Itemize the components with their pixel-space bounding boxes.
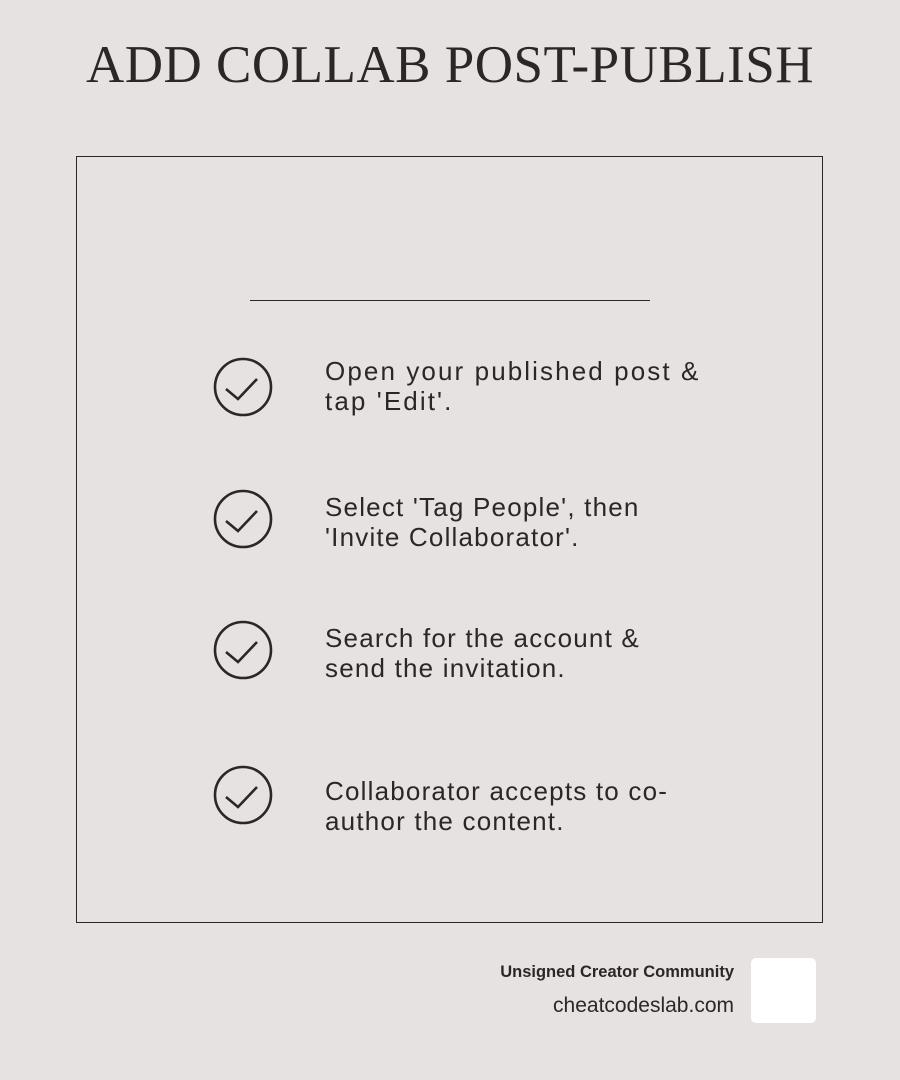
divider rule — [250, 300, 650, 301]
step 4 — [214, 766, 668, 836]
step 3 — [214, 620, 640, 683]
step 1 — [214, 356, 700, 416]
step 1: Open your published post & — [325, 356, 700, 386]
icon: check circle — [214, 620, 272, 680]
step 2: Select 'Tag People', then — [325, 492, 640, 522]
panel: steps frame — [76, 156, 823, 923]
step 4: author the content. — [325, 806, 565, 836]
icon: check circle — [214, 490, 272, 548]
step 2 — [214, 490, 640, 552]
step 4: Collaborator accepts to co- — [325, 776, 668, 806]
title: ADD COLLAB POST-PUBLISH — [86, 36, 814, 94]
step 2: 'Invite Collaborator'. — [325, 522, 580, 552]
step 3: Search for the account & — [325, 623, 640, 653]
icon: check circle — [214, 358, 272, 416]
icon: check circle — [214, 766, 272, 824]
step 1: tap 'Edit'. — [325, 386, 453, 416]
step 3: send the invitation. — [325, 653, 566, 683]
logo placeholder — [751, 958, 816, 1023]
footer: website: cheatcodeslab.com — [553, 994, 734, 1017]
footer: community name: Unsigned Creator Community — [500, 963, 734, 981]
